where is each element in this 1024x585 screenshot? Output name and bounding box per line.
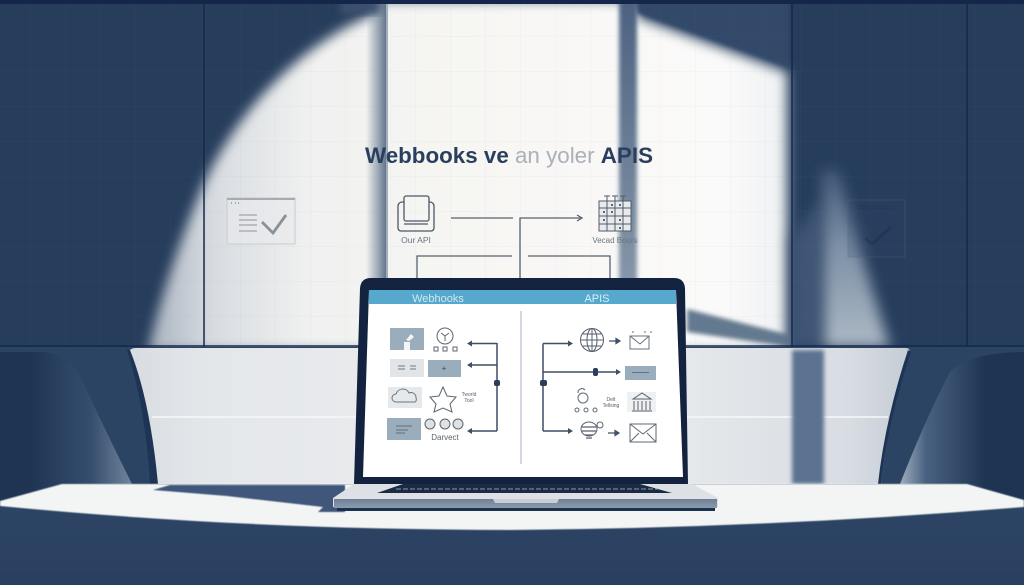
window shadows on wall [340, 0, 890, 350]
panel: bench [127, 348, 911, 484]
laptop screen [363, 290, 683, 477]
label: Delt Tellsing: Tellsing [603, 403, 620, 409]
arrow: bulb to mail [608, 430, 619, 436]
header label: APIS: APIS [584, 293, 610, 305]
label: Our API: Our API [401, 235, 431, 245]
laptop base [333, 484, 718, 511]
icon: document tile [387, 418, 421, 440]
icon: lightbulb [581, 422, 603, 438]
icon: network circle [434, 328, 457, 351]
icon: mail bottom [630, 424, 656, 442]
icon: mail top [630, 331, 651, 349]
icon: star [430, 387, 456, 412]
icon: bank [627, 392, 656, 412]
laptop [333, 278, 718, 511]
panel: table [0, 484, 1024, 585]
label: Darvect: Darvect [431, 433, 460, 442]
icon: Our API stack [398, 196, 434, 231]
arrows: apis connector [540, 340, 621, 434]
lower wall behind bench [0, 347, 1024, 512]
background icon: checklist card [227, 198, 295, 244]
panel: left chair [0, 352, 132, 505]
icon: plus tile [428, 360, 461, 377]
icon: pin tile [390, 328, 424, 350]
spotlight on wall [148, 0, 787, 352]
background icon: faded check card [848, 200, 905, 257]
screen divider [520, 311, 522, 464]
label: Tworld Tool: Tool [464, 398, 474, 404]
icon: globe [580, 328, 604, 352]
icon: text tile [390, 359, 424, 377]
label: Vecad Bours: Vecad Bours [592, 236, 638, 245]
icon: cloud people [575, 389, 597, 412]
arrows: diagram connectors above the laptop [417, 215, 610, 280]
label: Tworld Tool: Tworld [462, 392, 476, 398]
panel: right chair [900, 352, 1024, 505]
header bar: Webhooks: Webhooks [412, 293, 464, 305]
wall panel grid [0, 4, 1024, 346]
webhooks column icons [387, 328, 500, 442]
header bar: Webhooks [369, 290, 676, 305]
label: Delt Tellsing: Delt [607, 397, 615, 403]
title: Webbooks ve an yoler APIS [365, 143, 653, 168]
icon: dash tile [625, 366, 656, 380]
icon: three round badges [425, 419, 463, 429]
background icon: faded check card: Webhooks [857, 203, 895, 212]
arrows: webhooks connector [467, 340, 500, 434]
icon: cloud tile [388, 387, 422, 408]
apis column icons [540, 328, 656, 442]
arrow: globe to mail [609, 338, 620, 344]
icon: calendar grid [599, 196, 631, 231]
laptop lid [354, 278, 688, 484]
top ceiling band [0, 0, 1024, 4]
